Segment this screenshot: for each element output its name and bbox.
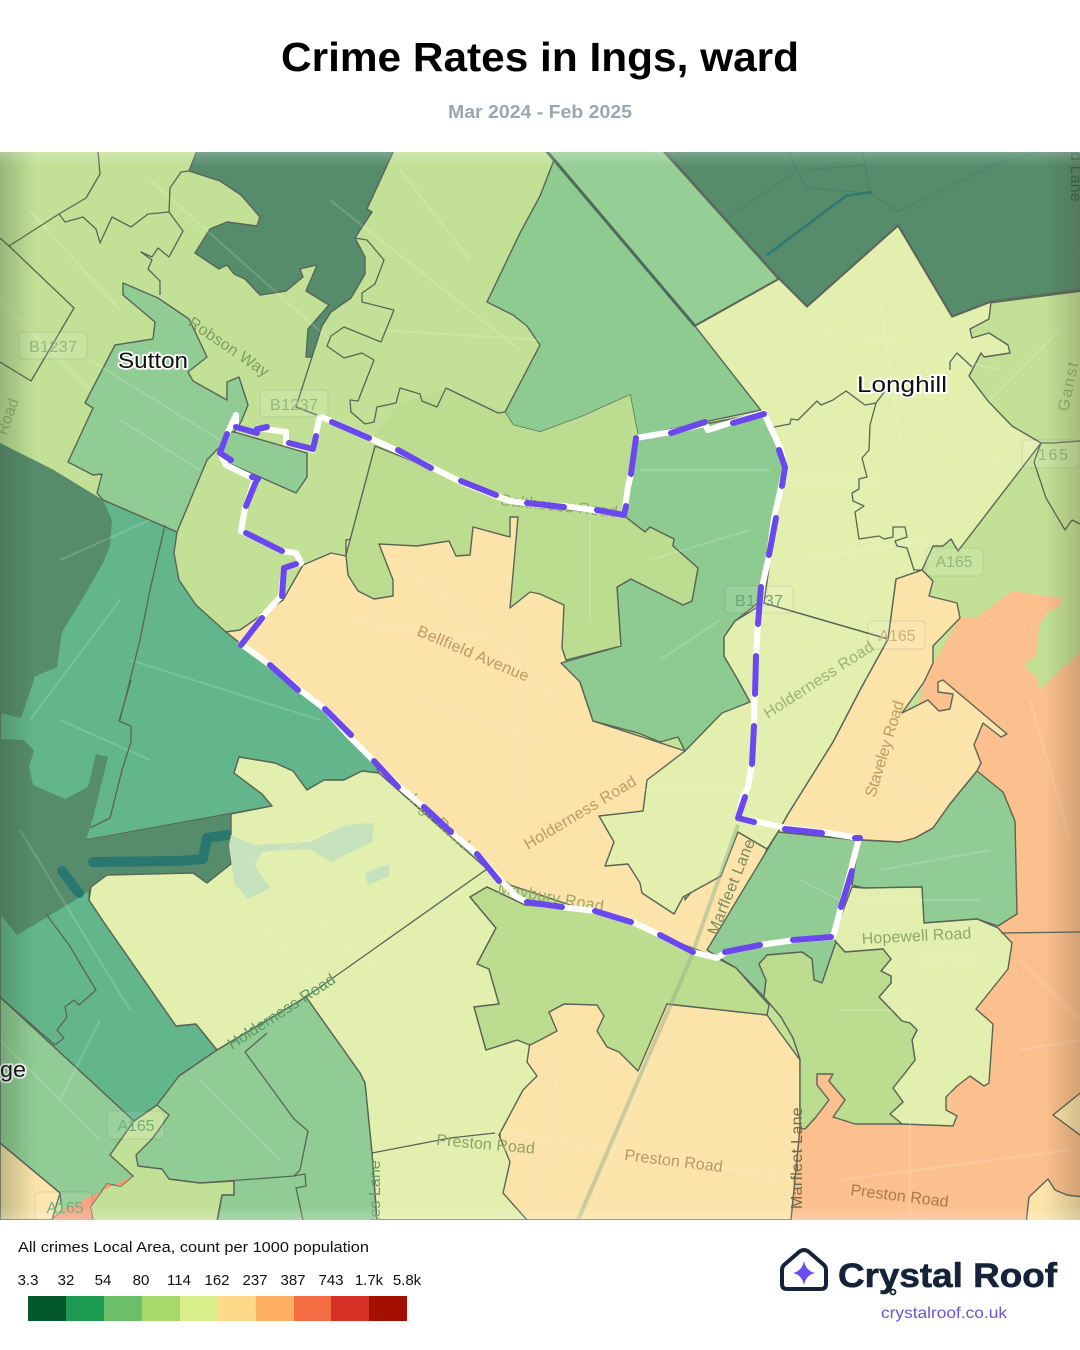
road labels: Salthouse Road — [500, 492, 619, 521]
green zone: Marfleet — [707, 832, 857, 997]
road labels: Preston Road — [850, 1182, 950, 1211]
yellow corner zones bottom-right — [1026, 1090, 1080, 1224]
legend colour bar — [28, 1296, 407, 1321]
road labels: Preston Road — [624, 1147, 724, 1176]
green zone left of the diagonal — [487, 148, 761, 436]
yellow zone: Staveley Road — [778, 570, 1007, 842]
green zone inside ward north-west — [220, 432, 307, 493]
legend scale numbers: 237 — [242, 1272, 268, 1289]
legend scale numbers: 80 — [133, 1272, 149, 1289]
legend scale numbers: 114 — [167, 1272, 191, 1289]
road labels: Holderness Road — [761, 638, 878, 722]
road labels: Holderness Road — [521, 773, 640, 853]
ward boundary: white base line — [220, 413, 859, 958]
pale zone: Hopewell Road — [833, 887, 1012, 1126]
legend scale numbers: 743 — [318, 1272, 344, 1289]
boundary lines between zones — [0, 148, 1080, 1220]
road labels — [0, 152, 1080, 1222]
pale zone: Longhill — [695, 226, 1041, 639]
place label: partial, cut by map edge: ge — [0, 1057, 26, 1082]
legend scale numbers: 32 — [58, 1272, 74, 1289]
road labels: Ings Road — [405, 790, 473, 854]
green zone far south-west — [0, 997, 134, 1220]
teal zone south-west — [0, 890, 216, 1122]
road labels: Marfleet Lane — [789, 1107, 806, 1209]
light green zone south of Hopewell — [759, 942, 917, 1129]
dark green band with lake — [0, 739, 231, 935]
green zone: ward east — [561, 413, 785, 751]
legend scale numbers: 5.8k — [393, 1272, 422, 1289]
orange zones east and south-east — [790, 591, 1080, 1220]
legend title: All crimes Local Area, count per 1000 population — [18, 1240, 369, 1256]
river: dark teal water — [62, 835, 227, 893]
title: Crime Rates in Ings, ward — [281, 34, 799, 80]
legend scale numbers: 387 — [280, 1272, 306, 1289]
logo wordmark: Crystal Roof — [838, 1257, 1058, 1295]
teal zone west — [0, 500, 379, 860]
legend scale numbers: 54 — [95, 1272, 111, 1289]
road shields: B1237 — [735, 593, 783, 610]
road shields: B1237 — [29, 339, 77, 356]
place label: Sutton: Sutton — [118, 348, 188, 373]
road labels: Marfleet Lane — [705, 837, 759, 937]
light green zone south of the ward — [470, 887, 769, 1071]
yellow zone: Preston Road south — [500, 1004, 800, 1220]
road shields: A165 — [46, 1200, 84, 1217]
road shields: A165 — [936, 554, 973, 571]
choropleth map panel — [0, 148, 1080, 1224]
pale zone: park and Holderness south — [89, 757, 537, 1220]
railway line — [578, 825, 738, 1220]
road labels: tes Lane — [367, 1160, 384, 1222]
road shields — [19, 332, 1080, 1220]
brand logo — [782, 1250, 1058, 1322]
base area: light green zones — [0, 152, 1080, 1220]
website url: crystalroof.co.uk — [881, 1305, 1008, 1322]
green zone: Sutton — [68, 283, 248, 532]
road labels: Preston Road — [436, 1132, 536, 1158]
road labels: Holderness Road — [225, 971, 339, 1053]
road shields: 165 — [1038, 447, 1068, 464]
road labels: Maybury Road — [496, 880, 605, 916]
road shields: A165 — [878, 628, 916, 645]
green zone south-west centre — [136, 997, 377, 1224]
mid green zone north centre — [544, 148, 779, 326]
yellow zone bottom-left — [0, 1143, 60, 1220]
legend panel — [18, 1240, 422, 1321]
yellow zone: Bellfield and Holderness — [225, 510, 767, 958]
legend scale numbers: 162 — [204, 1272, 230, 1289]
red-orange small zone — [52, 1176, 133, 1220]
road labels: Bellfield Avenue — [414, 623, 532, 686]
street network — [0, 170, 1080, 1215]
icon: house with crystal star — [782, 1250, 826, 1289]
road labels: Staveley Road — [863, 699, 908, 799]
dark green zone north — [189, 148, 395, 357]
place label: Longhill: Longhill — [857, 372, 947, 397]
park ponds — [229, 823, 389, 899]
road labels: Hopewell Road — [861, 925, 972, 948]
light green zone: Salthouse area — [346, 446, 698, 660]
green zone east of the ward — [852, 771, 1017, 926]
legend scale numbers: 1.7k — [355, 1272, 384, 1289]
subtitle: date range: Mar 2024 - Feb 2025 — [448, 102, 632, 122]
dark green zone north-east — [661, 148, 1080, 317]
legend scale numbers — [18, 1272, 422, 1289]
dark green zone far west — [0, 443, 112, 718]
road shields: B1237 — [270, 397, 318, 414]
ward boundary: purple dashes — [220, 414, 860, 952]
road labels: Robson Way — [185, 314, 272, 381]
road shields: A165 — [118, 1118, 155, 1135]
pale zone: Holderness Road north — [599, 603, 888, 914]
legend scale numbers: 3.3 — [18, 1272, 38, 1289]
light green zone north of the ward boundary — [504, 395, 638, 435]
map edge vignette — [0, 152, 1080, 1220]
